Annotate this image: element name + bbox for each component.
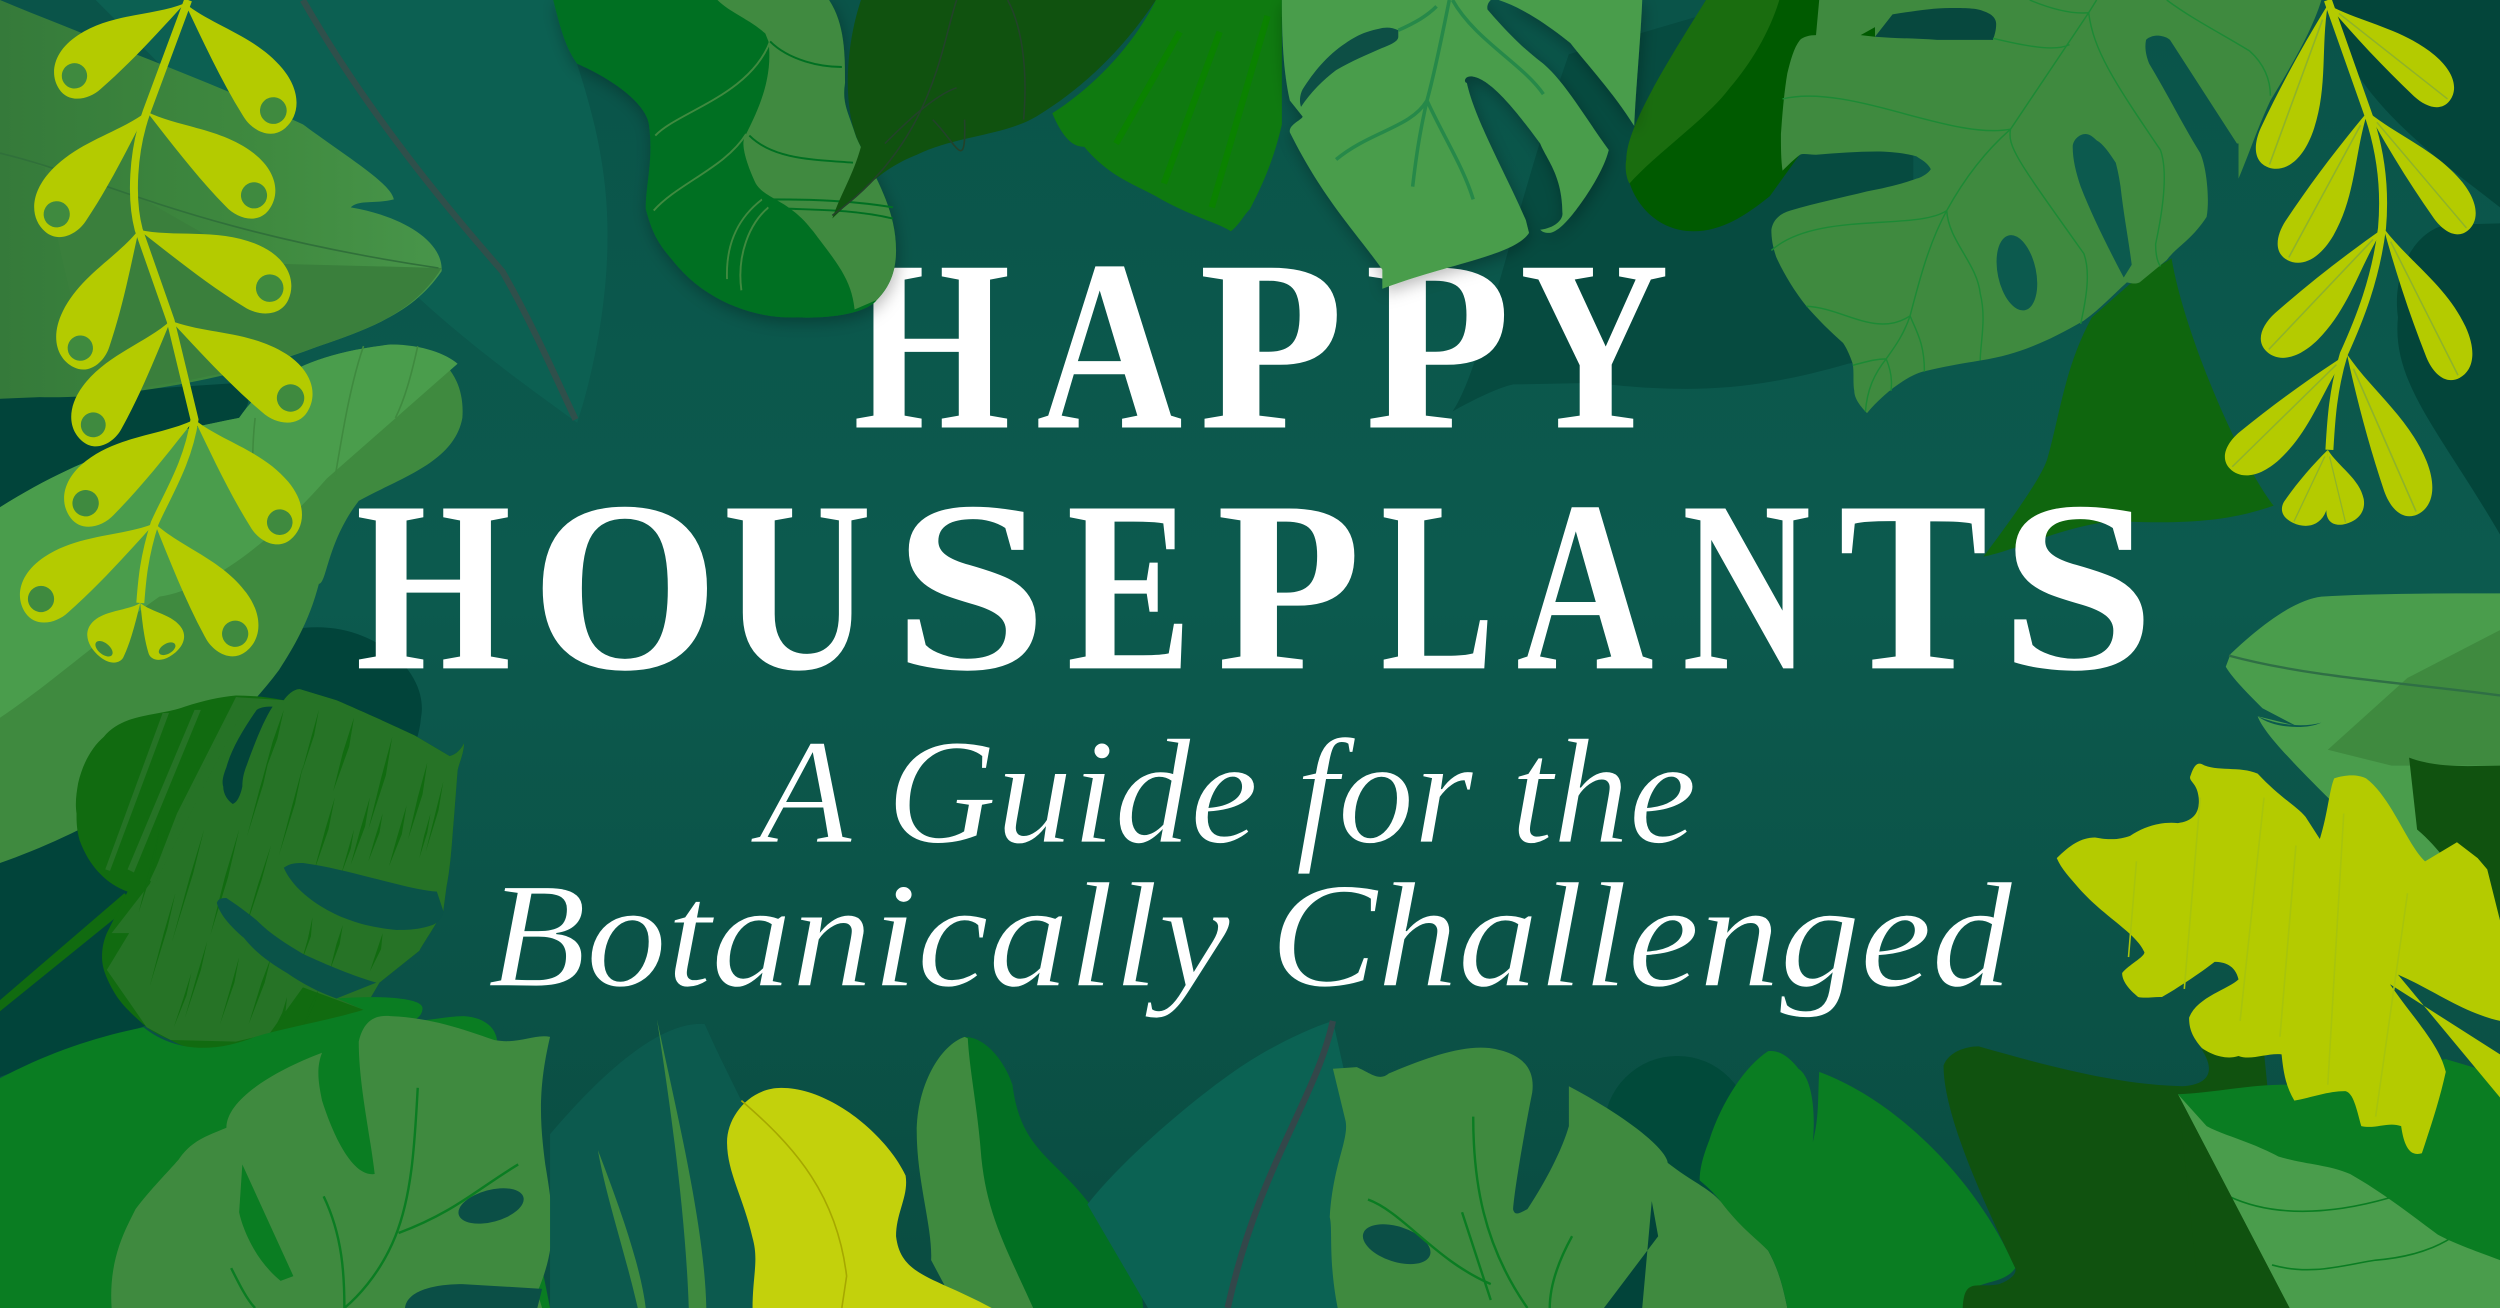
leaf: large green base, bottom left	[0, 997, 550, 1308]
vine leaves: pair 5	[49, 393, 318, 554]
vine leaves: pair 7	[79, 587, 191, 669]
leaf: green, bottom right corner	[2178, 1059, 2500, 1260]
subtitle	[488, 709, 2013, 1019]
leaf: striped, top centre left	[553, 0, 896, 318]
leaf: dark wedge, bottom right	[2178, 1094, 2290, 1308]
leaf: teal with stem, bottom centre	[1087, 1021, 1355, 1308]
vine: right	[2216, 0, 2489, 533]
leaf: teal blade, bottom centre left	[550, 1024, 765, 1308]
subtitle line 1: A Guide for the	[750, 709, 1696, 875]
vine leaves: pair 3	[2252, 213, 2485, 387]
leaf: green stem, left	[0, 893, 134, 1011]
leaf: dark green, top centre	[832, 0, 1156, 219]
vine leaves: pair 6	[5, 496, 274, 666]
leaf: yellow	[727, 1088, 992, 1308]
vine leaves: pair 5	[2278, 442, 2369, 533]
leaf: dark shadow shape, left	[0, 383, 249, 510]
leaf: dark bump, bottom centre	[1604, 1056, 1751, 1203]
vine: left	[5, 0, 327, 669]
leaf: far right dark backdrop	[2326, 0, 2500, 534]
leaf: yellow-green jagged, right	[2057, 764, 2500, 1154]
title: HAPPY HOUSEPLANTS	[0, 225, 2500, 721]
title line: HAPPY	[0, 225, 2500, 480]
leaf: deep green, top centre	[1626, 0, 1819, 231]
leaf: large monstera, top right	[1771, 0, 2321, 413]
leaf: dark teal top right backdrop	[1452, 0, 1913, 412]
vine leaves: pair 1	[2249, 0, 2466, 177]
vine leaves: pair 4	[2216, 339, 2445, 523]
leaf: green leaf behind yellow	[917, 1037, 1143, 1308]
leaf: broad green leaf, top left	[0, 0, 442, 399]
vine leaves: pair 2	[18, 86, 291, 247]
vine leaves: pair 4	[56, 292, 327, 456]
vine leaves: pair 1	[40, 0, 313, 144]
leaf: grass blades	[598, 1019, 706, 1308]
leaf: green, bottom centre right	[1700, 1051, 2015, 1308]
leaf: mottled monstera, left	[76, 689, 464, 1050]
leaf: dark circular leaf, left middle	[0, 627, 422, 1077]
leaf: teal blade with stem, top left	[96, 0, 608, 423]
leaf: mid green leaf, left	[0, 345, 463, 863]
leaf: bright green, top centre	[1052, 0, 1282, 231]
title line: HOUSEPLANTS	[0, 466, 2500, 721]
vine leaves: pair 2	[2270, 95, 2489, 274]
leaf: light green, bottom right	[2178, 1094, 2500, 1308]
leaf: monstera, bottom centre	[1330, 1048, 1787, 1308]
vine leaves: pair 3	[43, 198, 304, 378]
leaf: monstera, bottom left	[111, 1016, 552, 1308]
leaf: dark green, bottom right	[1944, 1046, 2290, 1308]
leaf: right middle	[2226, 593, 2500, 917]
subtitle line 2: Botanically Challenged	[488, 853, 2013, 1019]
leaf: monstera, top centre	[1282, 0, 1642, 289]
leaf: dark green triangular	[1983, 258, 2274, 557]
